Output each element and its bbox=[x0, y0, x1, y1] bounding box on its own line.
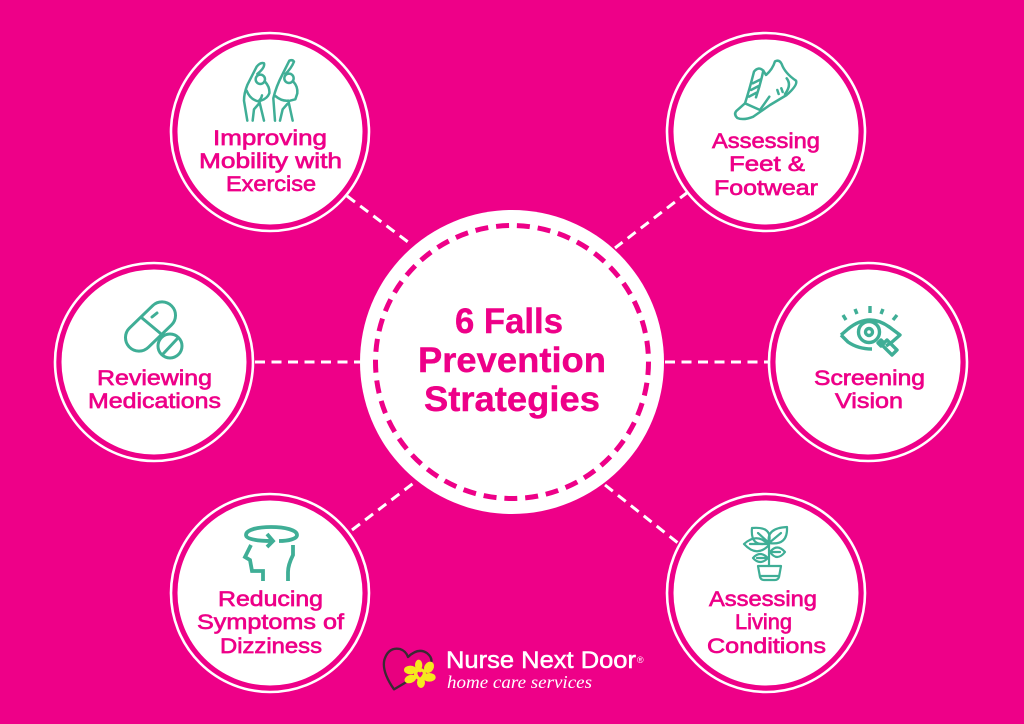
label bbox=[814, 367, 925, 413]
panel: reviewing medications bbox=[55, 263, 253, 461]
label: Footwear bbox=[714, 177, 818, 200]
panel: screening vision bbox=[769, 263, 967, 461]
label bbox=[707, 588, 826, 658]
title: Strategies bbox=[424, 380, 600, 419]
label: Living bbox=[735, 611, 792, 634]
label bbox=[197, 588, 344, 658]
panel: improving mobility with exercise bbox=[171, 33, 369, 231]
label: Vision bbox=[835, 390, 903, 413]
label: Dizziness bbox=[220, 635, 322, 658]
label: Screening bbox=[814, 367, 925, 390]
label bbox=[712, 130, 820, 200]
label: Conditions bbox=[707, 635, 826, 658]
icon: pills bbox=[120, 296, 182, 358]
center hub: 6 Falls Prevention Strategies bbox=[360, 210, 664, 514]
icon: sneaker bbox=[735, 61, 796, 119]
label: Reviewing bbox=[97, 367, 212, 390]
panel: reducing symptoms of dizziness bbox=[171, 494, 369, 692]
label: Exercise bbox=[226, 173, 316, 196]
label: Mobility with bbox=[199, 150, 342, 173]
title bbox=[418, 302, 606, 419]
registered mark: ® bbox=[637, 655, 644, 665]
label bbox=[199, 127, 342, 196]
wordmark: Nurse Next Door bbox=[446, 647, 636, 674]
icon: potted plant bbox=[744, 527, 787, 580]
label: Assessing bbox=[709, 588, 817, 611]
label: Medications bbox=[88, 390, 221, 413]
icon: eye with magnifier bbox=[841, 306, 900, 355]
logo: Nurse Next Door home care services bbox=[384, 647, 644, 692]
title: Prevention bbox=[418, 341, 606, 380]
label bbox=[88, 367, 221, 413]
icon: two people stretching bbox=[244, 60, 297, 121]
label: Assessing bbox=[712, 130, 820, 153]
icon: heart with flower bbox=[384, 649, 436, 689]
label: Reducing bbox=[218, 588, 323, 611]
label: Symptoms of bbox=[197, 611, 344, 634]
label: Improving bbox=[213, 127, 327, 150]
icon: head with spinning arrow bbox=[245, 527, 297, 581]
panel: assessing feet and footwear bbox=[667, 33, 865, 231]
label: Feet & bbox=[729, 153, 805, 176]
title: 6 Falls bbox=[455, 302, 563, 341]
tagline: home care services bbox=[447, 672, 592, 692]
panel: assessing living conditions bbox=[667, 494, 865, 692]
